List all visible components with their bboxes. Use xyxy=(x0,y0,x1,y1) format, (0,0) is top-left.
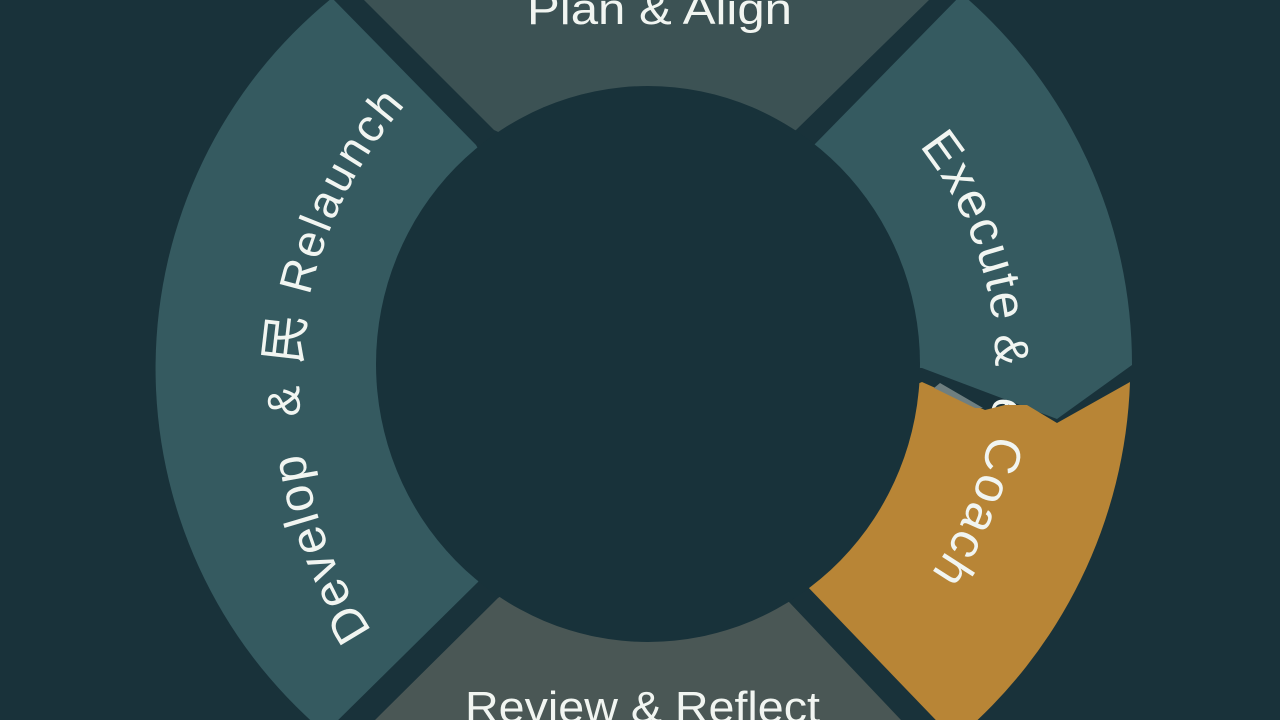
segment: Develop & Relaunch xyxy=(156,0,478,720)
segment: Execute & Coach, highlighted orange part xyxy=(809,382,1130,720)
segment: Review & Reflect xyxy=(350,500,930,720)
label: Coach: Coach xyxy=(933,440,1020,583)
label: Execute: Execute xyxy=(922,128,1018,318)
segment: Execute & Coach, upper part xyxy=(814,0,1132,419)
label: Develop: Develop xyxy=(280,457,370,646)
sliver between segments xyxy=(934,383,983,408)
centre hub xyxy=(376,86,920,642)
segment: Plan & Align xyxy=(334,0,960,200)
label: ampersand: & xyxy=(268,386,300,415)
label: garbled glyph: 民 xyxy=(261,318,308,362)
label: Relaunch: Relaunch xyxy=(280,94,404,292)
label: ampersand and partial letter: & e xyxy=(992,336,1028,408)
